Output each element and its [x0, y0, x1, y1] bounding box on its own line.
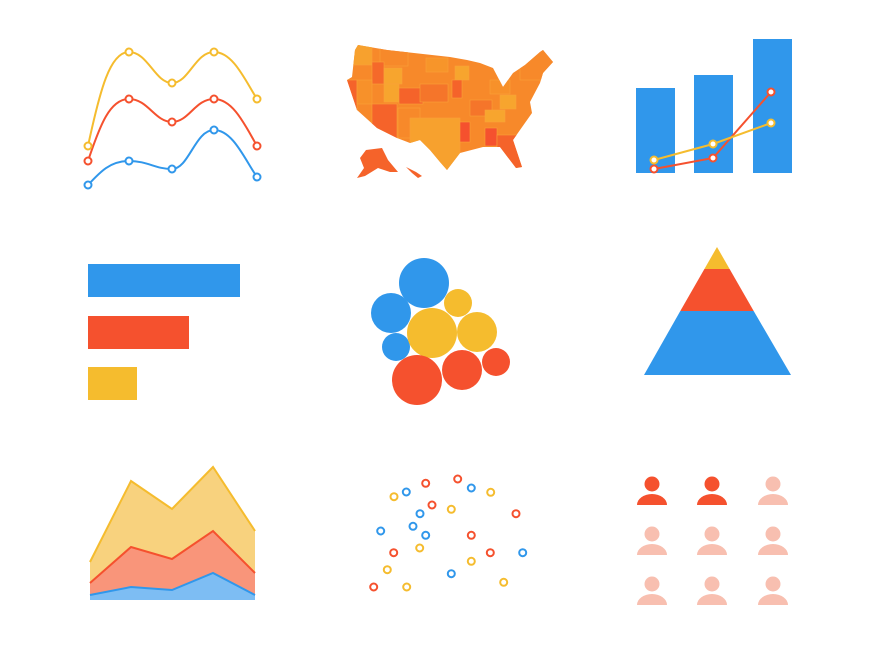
bar and line chart [636, 39, 792, 173]
people icon grid [637, 476, 788, 605]
scatter plot [370, 476, 526, 590]
US map [347, 45, 553, 178]
Alaska [357, 148, 398, 178]
Hawaii [406, 167, 422, 178]
bubble chart [371, 258, 510, 405]
area chart [90, 467, 255, 600]
line chart [84, 48, 260, 188]
pyramid [644, 247, 791, 375]
horizontal bar chart [88, 264, 240, 400]
